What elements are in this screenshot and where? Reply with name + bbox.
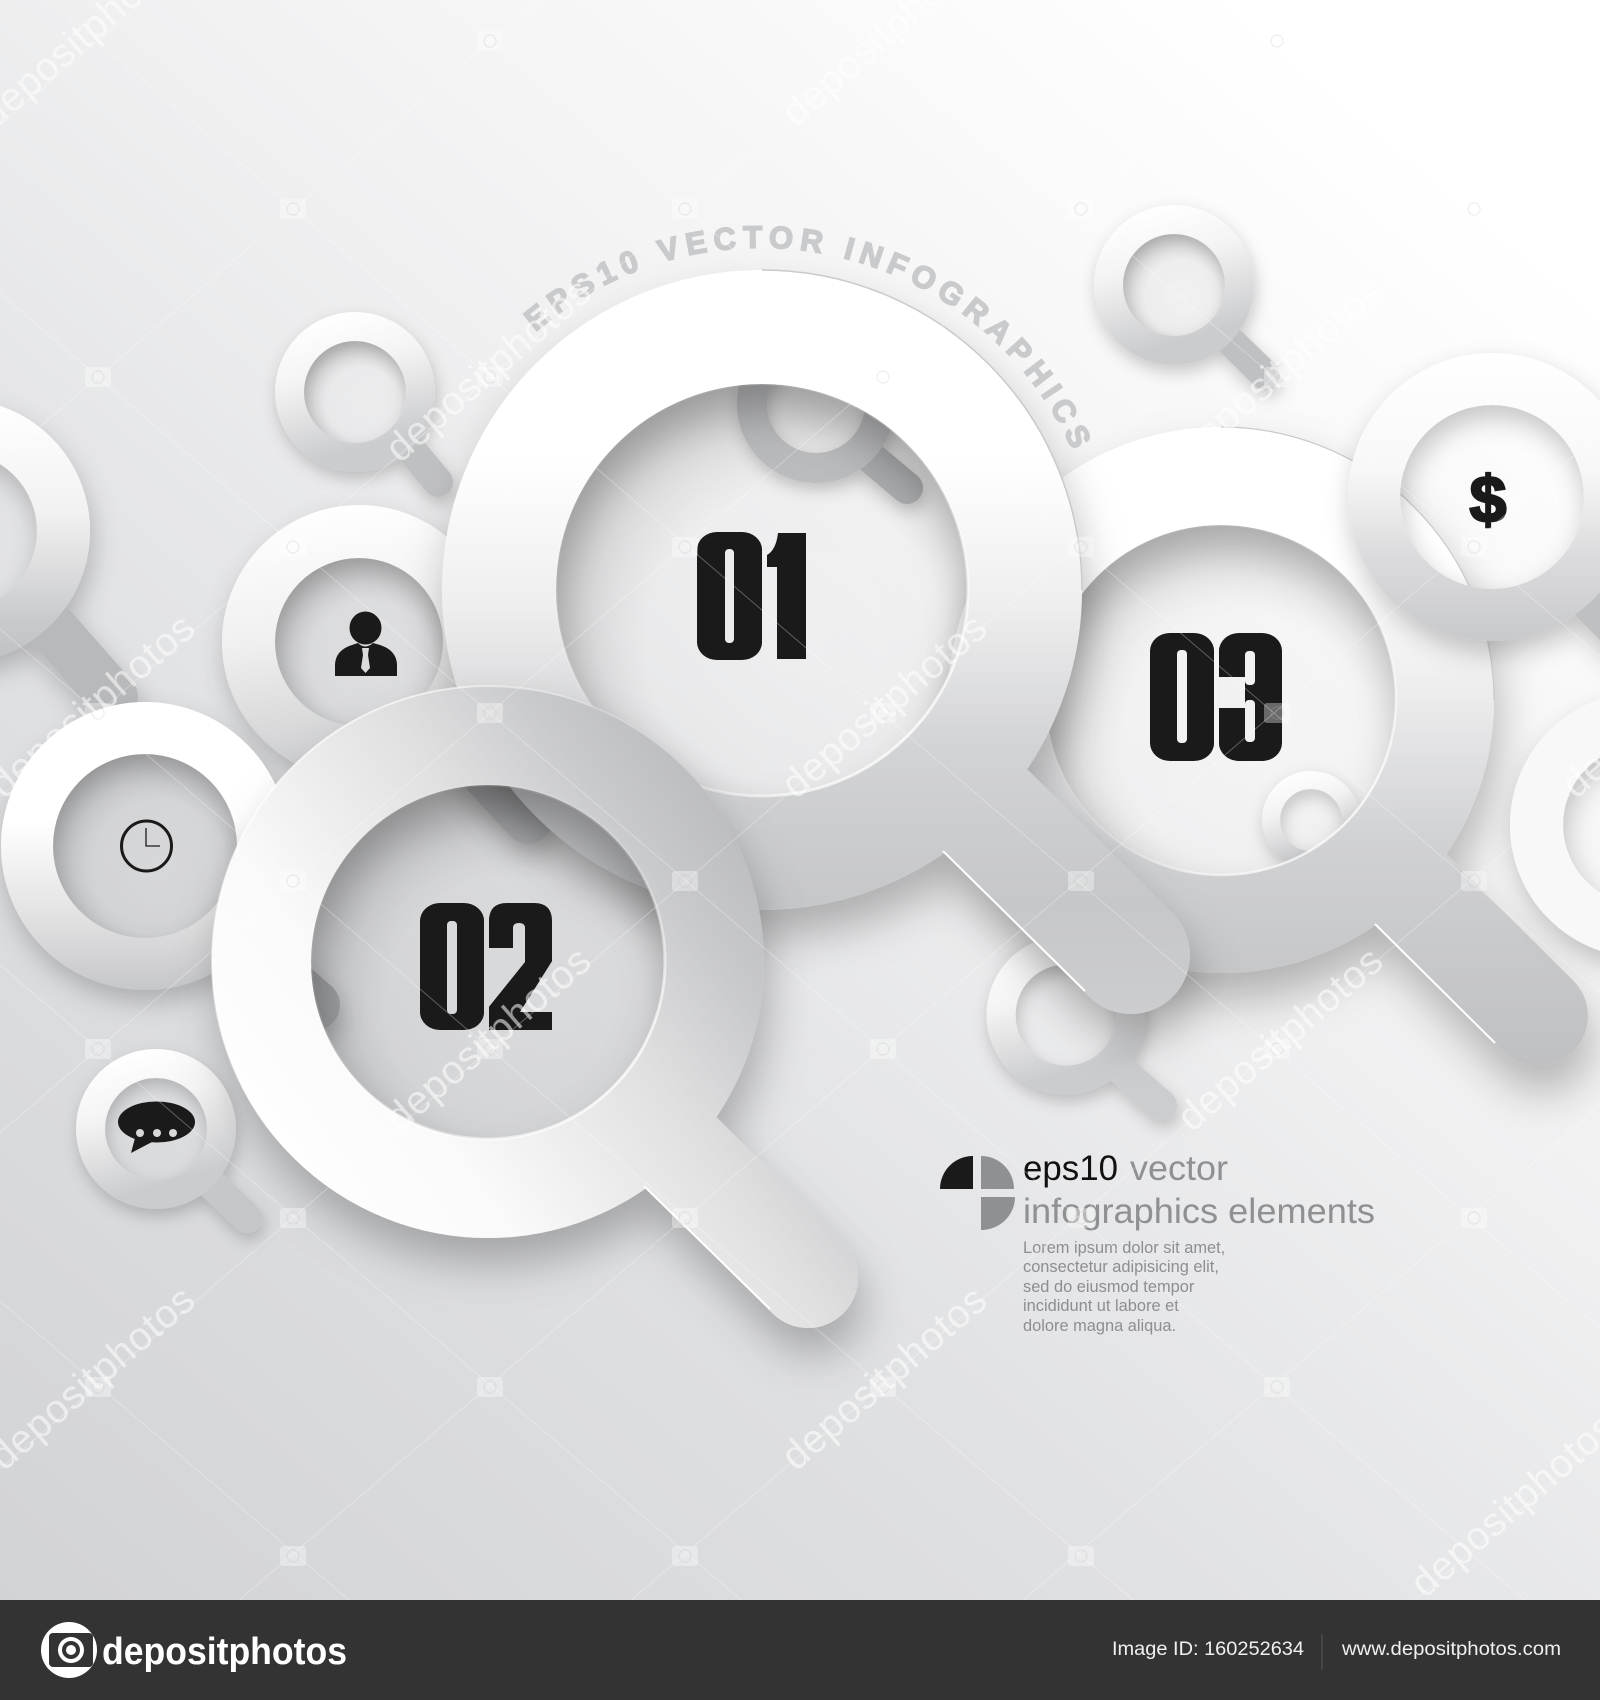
footer image id: Image ID: 160252634 <box>1112 1639 1304 1660</box>
footer bar <box>0 1600 1600 1700</box>
footer website: www.depositphotos.com <box>1341 1639 1561 1660</box>
magnifier: left edge <box>0 426 113 697</box>
icon: person <box>335 612 397 676</box>
watermark: depositphotos text: depositphotos <box>377 938 600 1140</box>
legend icon: quarter circles <box>940 1156 1015 1230</box>
ring highlight: 03 <box>1046 427 1495 1043</box>
hole shade: small top right <box>1123 234 1225 336</box>
magnifier: small inside 03 <box>1271 780 1365 875</box>
watermark: depositphotos text: depositphotos <box>773 605 996 807</box>
magnifier: small top right <box>1108 220 1265 375</box>
curved title: EPS10 VECTOR INFOGRAPHICS <box>522 226 1090 448</box>
number 03 <box>1150 633 1282 761</box>
hole shade: person <box>275 558 443 726</box>
magnifier: right edge <box>1536 718 1600 932</box>
body text: lorem ipsum <box>1023 1239 1225 1335</box>
watermark: depositphotos text: depositphotos <box>1169 938 1392 1140</box>
magnifier: 03 <box>997 476 1538 1016</box>
footer logo text: depositphotos <box>102 1631 347 1673</box>
body text: lorem ipsum: consectetur adipisicing elit, <box>1023 1258 1219 1276</box>
watermark: depositphotos text: depositphotos <box>377 269 600 471</box>
watermark: depositphotos text: depositphotos <box>1169 269 1392 471</box>
number 01: 01 <box>698 498 826 699</box>
ring highlight: 01 <box>556 270 1085 991</box>
hole shade: 01 <box>556 384 968 796</box>
body text: lorem ipsum: incididunt ut labore et <box>1023 1297 1179 1315</box>
heading: eps10 vector infographics elements: vector <box>1130 1149 1228 1188</box>
number 03: 03 <box>1148 600 1286 801</box>
magnifier: dollar <box>1374 379 1600 685</box>
magnifier: 01 <box>499 327 1131 955</box>
magnifier: small top left <box>290 326 438 482</box>
magnifier: 02 <box>262 736 808 1278</box>
magnifier: small inside 01 <box>752 340 907 488</box>
hole shade: clock <box>53 754 237 938</box>
hole shade: small top left <box>304 341 406 443</box>
number 02: 02 <box>416 869 554 1070</box>
watermark: depositphotos text: depositphotos <box>773 1277 996 1479</box>
body text: lorem ipsum: dolore magna aliqua. <box>1023 1317 1176 1335</box>
icon: clock <box>122 821 172 871</box>
number 01 <box>697 532 806 660</box>
number 02 <box>420 903 552 1030</box>
magnifier: chat <box>90 1064 247 1218</box>
hole shade: 02 <box>311 785 665 1139</box>
hole shade: 03 <box>1046 525 1396 875</box>
icon: chat bubble <box>118 1102 195 1153</box>
footer logo icon <box>41 1622 97 1678</box>
magnifier: small bottom <box>1001 950 1162 1105</box>
heading: eps10 vector infographics elements <box>1023 1149 1375 1231</box>
body text: lorem ipsum: Lorem ipsum dolor sit amet, <box>1023 1239 1225 1257</box>
heading: eps10 vector infographics elements: eps10 <box>1023 1149 1118 1188</box>
icon: dollar: $ <box>1470 462 1506 536</box>
ring highlight: 02 <box>212 686 770 1309</box>
watermark: camera icons <box>85 31 1487 1566</box>
magnifier: clock <box>27 728 315 1005</box>
body text: lorem ipsum: sed do eiusmod tempor <box>1023 1278 1195 1296</box>
heading: eps10 vector infographics elements: infographics elements <box>1023 1192 1375 1231</box>
magnifier: person <box>248 532 528 819</box>
